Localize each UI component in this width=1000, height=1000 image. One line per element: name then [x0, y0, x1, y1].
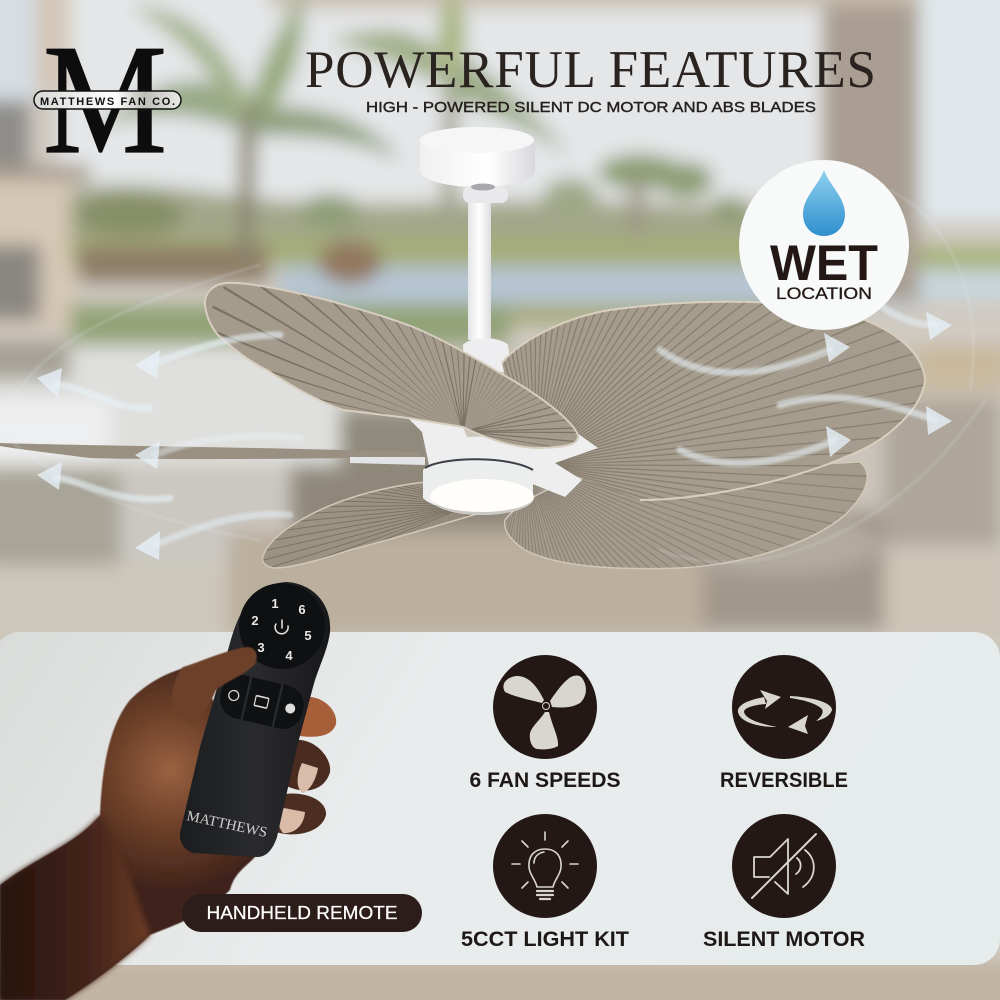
remote buttons	[216, 671, 308, 733]
subtitle: HIGH - POWERED SILENT DC MOTOR AND ABS BLADES	[366, 99, 816, 116]
title: POWERFUL FEATURES	[305, 41, 876, 99]
remote brand: MATTHEWS	[185, 808, 269, 841]
location label: LOCATION	[776, 285, 872, 303]
handheld remote pill	[182, 894, 422, 932]
blade: edge-on left	[0, 443, 420, 459]
bottom features panel	[0, 632, 1000, 965]
power symbol	[275, 620, 288, 634]
coupler	[463, 338, 512, 372]
dial numbers: 3	[257, 640, 265, 655]
remote dial	[239, 583, 325, 669]
icon: rotation arrows	[738, 690, 832, 734]
blade: lower right	[504, 462, 866, 570]
canopy	[420, 127, 535, 203]
tree line	[70, 185, 830, 250]
dial numbers: 5	[304, 628, 312, 643]
air flow arrows	[0, 190, 985, 562]
hand holding remote	[0, 582, 336, 1000]
label: silent motor: SILENT MOTOR	[703, 928, 865, 951]
logo: Matthews Fan Co: M	[43, 12, 167, 186]
dial numbers: 4	[285, 648, 293, 663]
ceiling fan	[0, 127, 926, 570]
logo: Matthews Fan Co: MATTHEWS FAN CO.	[40, 96, 175, 108]
pillar	[822, 5, 919, 300]
label: 5cct light kit: 5CCT LIGHT KIT	[461, 928, 629, 951]
feature: 6 fan speeds	[493, 655, 597, 759]
label: 6 fan speeds: 6 FAN SPEEDS	[470, 769, 620, 792]
floor	[0, 345, 1000, 645]
motor trim line	[425, 459, 533, 470]
LED light	[430, 479, 534, 515]
dial numbers: 2	[251, 613, 259, 628]
dial numbers: 6	[298, 602, 306, 617]
palms	[238, 95, 258, 262]
icon: water drop	[803, 170, 845, 236]
remote control	[180, 582, 330, 857]
blade: lower left	[262, 482, 476, 569]
fingers	[270, 697, 336, 834]
feature: 5cct light kit	[493, 814, 597, 918]
handheld remote pill: HANDHELD REMOTE	[206, 902, 398, 923]
thumb	[172, 647, 257, 724]
motor housing	[423, 455, 533, 512]
blade: upper right	[501, 300, 926, 501]
blade irons	[350, 418, 598, 497]
dial numbers	[251, 596, 312, 663]
wet label: WET	[770, 235, 878, 291]
air flow arrow heads	[37, 312, 952, 560]
feature: reversible	[732, 655, 836, 759]
arm and palm	[0, 667, 260, 1000]
icon: muted speaker	[752, 834, 816, 898]
dial numbers: 1	[271, 596, 279, 611]
label: reversible: REVERSIBLE	[720, 769, 848, 792]
wet location badge	[739, 160, 909, 330]
wrist shadow	[0, 815, 150, 1000]
blade: upper left	[204, 282, 580, 449]
icon: light bulb	[512, 832, 578, 899]
downrod	[468, 203, 491, 340]
icon: fan	[503, 676, 586, 749]
feature: silent motor	[732, 814, 836, 918]
